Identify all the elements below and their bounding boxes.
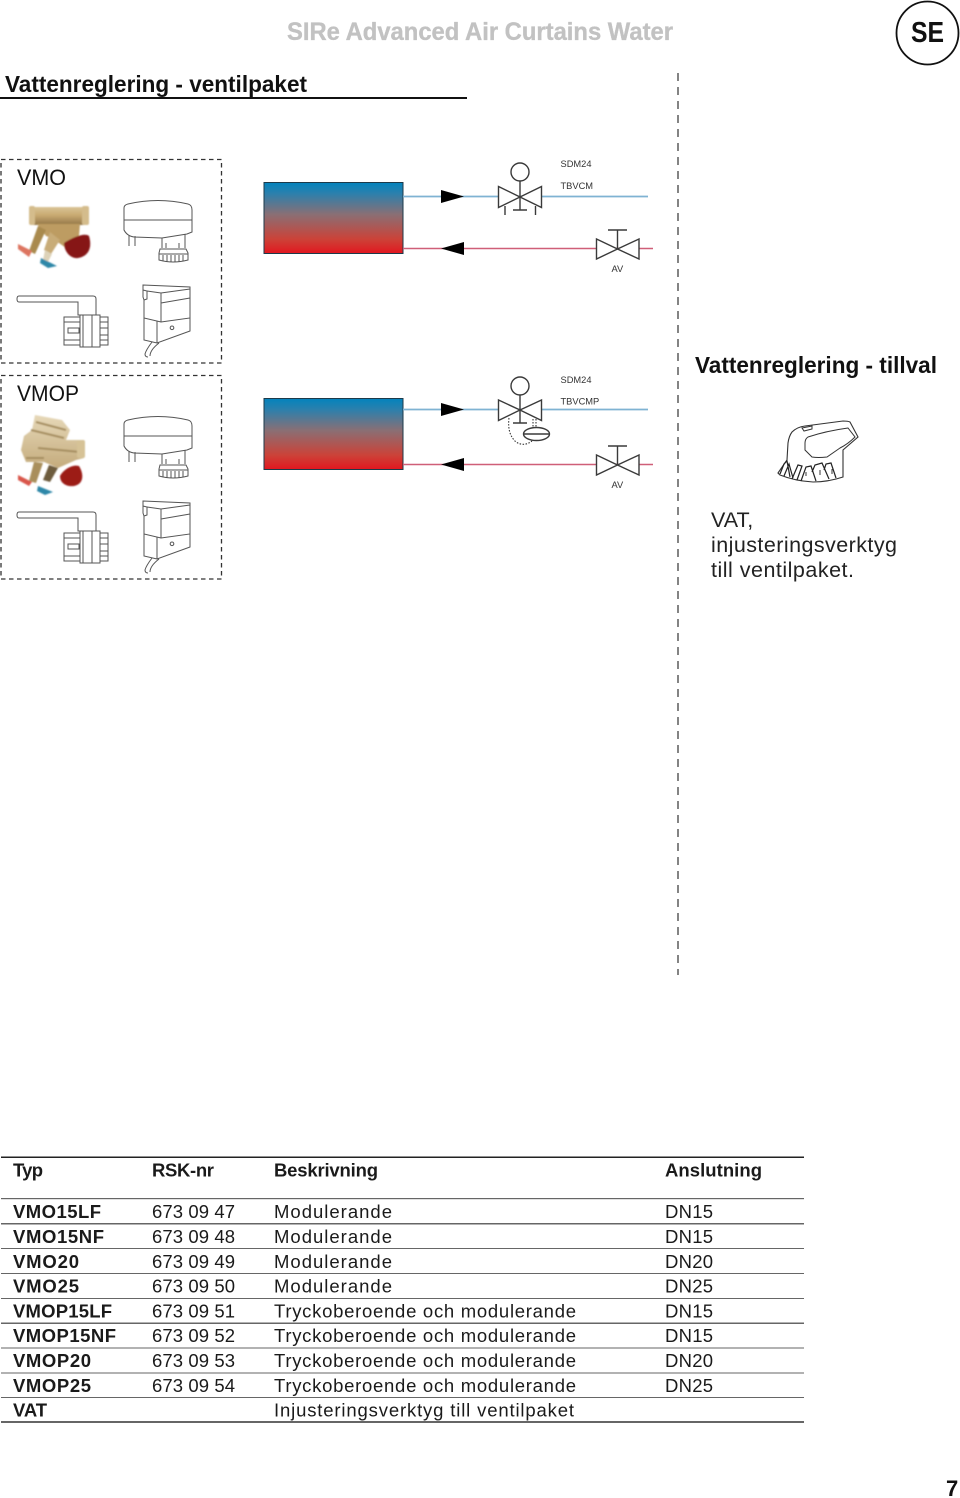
return pipe (403, 248, 653, 250)
row VMOP20: VMOP20 (13, 1350, 91, 1371)
row VMO25 (13, 1276, 713, 1296)
row VMOP15LF: VMOP15LF (13, 1300, 112, 1322)
arrow: supply flow (441, 403, 464, 416)
panel: VMO package (1, 160, 222, 363)
row VAT (13, 1400, 574, 1420)
icon: VMO ball valve (17, 296, 108, 347)
row VMOP20: 673 09 53 (152, 1350, 235, 1371)
icon: VAT adjustment tool (778, 421, 858, 482)
icon: VMO box actuator (143, 285, 190, 357)
row VMO25: Modulerande (274, 1276, 392, 1296)
panel: VMOP package (1, 376, 222, 579)
row VMOP15NF: Tryckoberoende och modulerande (274, 1325, 576, 1346)
row VMO25: DN25 (665, 1276, 713, 1296)
table header row: Anslutning (665, 1160, 762, 1180)
arrow: supply flow (441, 190, 464, 203)
row VMOP15LF (13, 1300, 713, 1322)
coil with heating gradient (264, 182, 403, 254)
row VMOP25: Tryckoberoende och modulerande (274, 1375, 576, 1396)
label VMOP: VMOP (17, 381, 79, 406)
row VMO20 (13, 1251, 713, 1272)
row VMO15NF: Modulerande (274, 1226, 392, 1247)
arrow: return flow (441, 242, 464, 255)
text: VAT description: injusteringsverktyg (711, 533, 897, 557)
row VMO15LF: Modulerande (274, 1201, 392, 1222)
row VMOP15NF: VMOP15NF (13, 1325, 116, 1346)
vertical dashed divider (677, 73, 679, 975)
section heading: tillval: Vattenreglering - tillval (695, 352, 937, 378)
row VMOP20 (13, 1350, 713, 1371)
row VMO25: 673 09 50 (152, 1276, 235, 1296)
row VAT: VAT (13, 1400, 48, 1420)
row VMOP25 (13, 1375, 713, 1396)
row VMOP20: DN20 (665, 1350, 713, 1371)
symbol: pressure-independent control valve (498, 377, 550, 444)
row VMO15NF: 673 09 48 (152, 1226, 235, 1247)
row VMOP25: DN25 (665, 1375, 713, 1396)
row VMO20: 673 09 49 (152, 1251, 235, 1272)
table header row: Beskrivning (274, 1160, 378, 1180)
text: VAT description (711, 508, 897, 582)
supply pipe (403, 408, 648, 410)
row VMOP20: Tryckoberoende och modulerande (274, 1350, 576, 1371)
schematic: VMO circuit (264, 159, 653, 274)
row VMOP15NF: DN15 (665, 1325, 713, 1346)
table header row: Typ (13, 1160, 43, 1180)
symbol: shut-off valve AV (596, 230, 639, 259)
text: VAT description: VAT, (711, 508, 753, 532)
row VMO15NF: DN15 (665, 1226, 713, 1247)
row VMOP15LF: 673 09 51 (152, 1300, 235, 1322)
icon: VMOP actuator (124, 416, 192, 478)
icon: VMOP box actuator (143, 501, 190, 573)
table rules (1, 1156, 804, 1423)
label SDM24: SDM24 (560, 375, 592, 385)
row VMOP15NF: 673 09 52 (152, 1325, 235, 1346)
row VMO15LF (13, 1201, 713, 1222)
row VMOP15NF (13, 1325, 713, 1346)
table header row: RSK-nr (152, 1160, 214, 1180)
row VMO15LF: DN15 (665, 1201, 713, 1222)
row VMOP15LF: Tryckoberoende och modulerande (274, 1300, 576, 1322)
row VMO15LF: 673 09 47 (152, 1201, 235, 1222)
row VAT: Injusteringsverktyg till ventilpaket (274, 1400, 574, 1420)
row VMO15NF (13, 1226, 713, 1247)
table: product list (1, 1156, 804, 1423)
row VMOP15LF: DN15 (665, 1300, 713, 1322)
row VMO20: DN20 (665, 1251, 713, 1272)
symbol: control valve (498, 163, 542, 215)
arrow: return flow (441, 458, 464, 471)
text: VAT description: till ventilpaket. (711, 558, 854, 582)
row VMO20: Modulerande (274, 1251, 392, 1272)
photo: VMO regulating valve (18, 206, 90, 268)
return pipe (403, 464, 653, 466)
label TBVCM: TBVCM (560, 181, 593, 191)
language badge SE (896, 2, 958, 64)
row VMO15LF: VMO15LF (13, 1201, 101, 1222)
label AV: AV (612, 480, 624, 490)
document header title: SIRe Advanced Air Curtains Water (287, 18, 673, 46)
icon: VMO actuator (124, 200, 192, 262)
row VMO15NF: VMO15NF (13, 1226, 104, 1247)
row VMOP25: 673 09 54 (152, 1375, 235, 1396)
symbol: shut-off valve AV (596, 446, 639, 475)
row VMO20: VMO20 (13, 1251, 79, 1272)
label VMO: VMO (17, 165, 66, 190)
label AV: AV (612, 264, 624, 274)
photo: VMOP regulating valve (18, 415, 85, 495)
icon: VMOP ball valve (17, 512, 108, 563)
section heading: ventilpaket: Vattenreglering - ventilpaket (5, 71, 307, 97)
label TBVCMP: TBVCMP (560, 396, 599, 406)
schematic: VMOP circuit (264, 375, 653, 490)
coil with heating gradient (264, 398, 403, 470)
table header row (13, 1160, 762, 1180)
language badge SE: SE (911, 17, 944, 49)
supply pipe (403, 196, 648, 198)
row VMO25: VMO25 (13, 1276, 79, 1296)
row VMOP25: VMOP25 (13, 1375, 91, 1396)
label SDM24: SDM24 (560, 159, 592, 169)
